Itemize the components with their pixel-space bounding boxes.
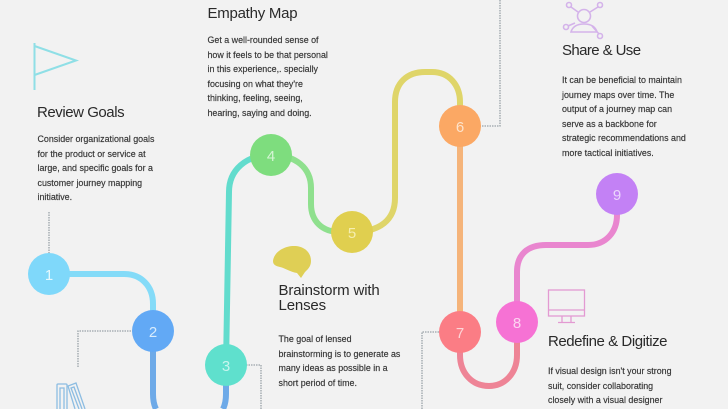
text: Review Goals body	[38, 134, 154, 202]
text: Share & Use body: more tactical initiatives.	[562, 148, 654, 158]
text: Share & Use body	[562, 75, 686, 158]
path segment 4 to 5	[271, 155, 352, 232]
heading: Redefine & Digitize: Redefine & Digitize	[548, 332, 667, 350]
icon: brain	[273, 246, 311, 278]
step 9	[596, 173, 638, 215]
text: Redefine body	[548, 366, 672, 406]
text: Brainstorm body	[278, 334, 400, 388]
text: Review Goals body: customer journey mapping	[38, 178, 142, 188]
path segment 5 to 6	[352, 72, 460, 232]
step 3: 3	[222, 358, 230, 375]
text: Empathy Map body	[208, 35, 328, 118]
text: Share & Use body: serve as a backbone for	[562, 118, 657, 128]
step 6: 6	[456, 119, 464, 136]
icon: flag	[34, 43, 76, 90]
text: Empathy Map body: how it feels to be that personal	[208, 50, 328, 60]
step 4: 4	[267, 148, 275, 165]
dotted connectors	[49, 0, 500, 409]
step 4	[250, 134, 292, 176]
heading: Review Goals: Review Goals	[37, 104, 124, 121]
path segment 8 to 9	[517, 194, 617, 322]
step 7: 7	[456, 325, 464, 342]
path segment 2 to 3	[153, 331, 226, 409]
step 7	[439, 311, 481, 353]
step 3	[205, 344, 247, 386]
text: Share & Use body: strategic recommendations and	[562, 133, 686, 143]
text: Redefine body: suit, consider collaborating	[548, 380, 653, 390]
step 2	[132, 310, 174, 352]
step 6	[439, 105, 481, 147]
text: Brainstorm body: short period of time.	[278, 378, 357, 388]
icon: network person	[564, 2, 602, 38]
step 2: 2	[149, 324, 157, 341]
text: Empathy Map body: thinking, feeling, seeing,	[208, 93, 303, 103]
text: Share & Use body: It can be beneficial to maintain	[562, 75, 682, 85]
step 1: 1	[45, 267, 53, 284]
text: Empathy Map body: in this experience,. specially	[208, 64, 318, 74]
text: Redefine body: If visual design isn't your strong	[548, 366, 672, 376]
text: Brainstorm body: brainstorming is to generate as	[278, 348, 400, 358]
text: Empathy Map body: hearing, saying and doing.	[208, 108, 312, 118]
heading: Empathy Map: Empathy Map	[208, 5, 297, 22]
text: Empathy Map body: Get a well-rounded sense of	[208, 35, 319, 45]
path segment 3 to 4	[226, 155, 271, 365]
heading: Brainstorm with Lenses: Brainstorm with	[278, 282, 380, 299]
text: Empathy Map body: focusing on what they're	[208, 78, 303, 88]
heading: Brainstorm with Lenses: Lenses	[278, 297, 326, 314]
path segment 6 to 7	[457, 126, 463, 332]
path segment 1 to 2	[49, 274, 153, 331]
step 9: 9	[613, 187, 621, 204]
step 8: 8	[513, 315, 521, 332]
text: Review Goals body: for the product or service at	[38, 148, 146, 158]
step 1	[28, 253, 70, 295]
step 5	[331, 211, 373, 253]
text: Brainstorm body: many ideas as possible in a	[278, 363, 388, 373]
text: Share & Use body: output of a journey map can	[562, 104, 672, 114]
text: Review Goals body: large, and specific goals for a	[38, 163, 153, 173]
text: Review Goals body: Consider organizational goals	[38, 134, 154, 144]
text: Brainstorm body: The goal of lensed	[278, 334, 352, 344]
icon: binders	[57, 383, 85, 409]
step 5: 5	[348, 225, 356, 242]
heading: Share & Use: Share & Use	[562, 42, 640, 59]
text: Share & Use body: journey maps over time. The	[562, 90, 674, 100]
heading: Brainstorm with Lenses	[278, 282, 380, 314]
text: Redefine body: closely with a visual designer	[548, 395, 662, 405]
text: Review Goals body: initiative.	[38, 192, 72, 202]
step 8	[496, 301, 538, 343]
icon: monitor	[548, 290, 584, 322]
path segment 7 to 8	[460, 322, 517, 386]
